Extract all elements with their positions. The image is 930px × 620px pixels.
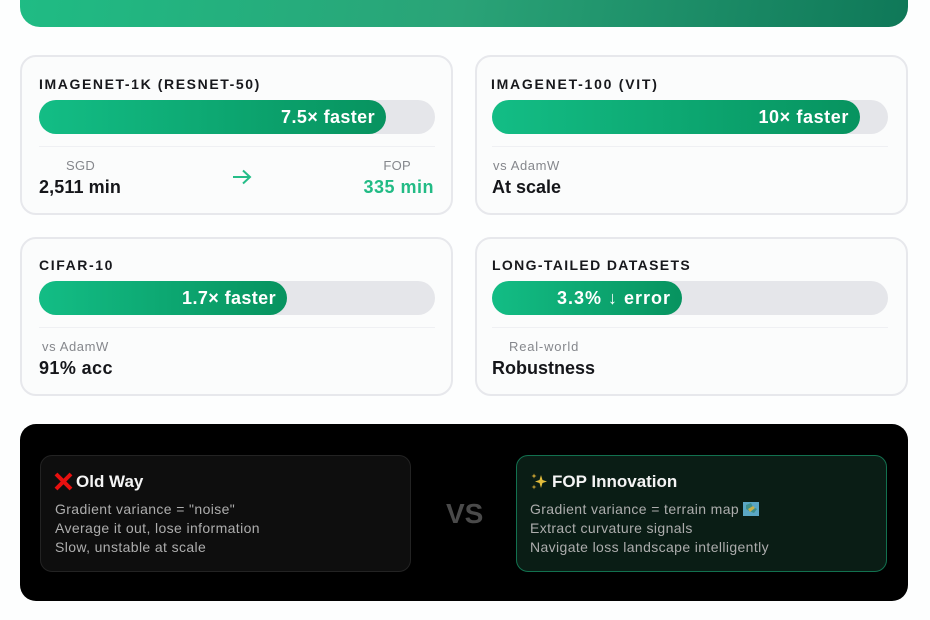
value: FOP time: 335 min [363,177,434,197]
progress bar: 7.5x faster [39,100,435,134]
label: real-world: Real-world [509,339,579,354]
heading: FOP innovation: FOP Innovation [552,472,677,491]
panel: old way [40,455,411,572]
header banner [20,0,908,27]
progress bar: 3.3% error: 3.3% ↓ error [557,288,671,308]
text: old way points [55,501,260,555]
label: versus: VS [446,498,483,529]
heading: long-tailed datasets: LONG-TAILED DATASETS [492,256,691,272]
label: vs AdamW: vs AdamW [493,158,560,173]
heading: CIFAR-10: CIFAR-10 [39,256,114,272]
value: robustness: Robustness [492,358,595,378]
label: SGD: SGD [66,158,95,173]
heading: ImageNet-100: IMAGENET-100 (VIT) [491,76,659,92]
panel: ImageNet-100 [475,55,908,215]
panel: comparison [20,424,908,601]
heading: ImageNet-1K: IMAGENET-1K (RESNET-50) [39,76,261,92]
progress bar: 7.5x faster: 7.5× faster [281,107,375,127]
progress bar: 10x faster [492,100,888,134]
text: FOP points: Gradient variance = terrain map [530,501,739,517]
text: FOP points: Extract curvature signals [530,520,693,536]
value: at scale: At scale [492,177,561,197]
icon: arrow [233,170,252,184]
progress bar: 1.7x faster [39,281,435,315]
label: FOP: FOP [383,158,411,173]
text: FOP points: Navigate loss landscape intelligently [530,539,769,555]
panel: long-tailed datasets [475,237,908,396]
text: old way points: Slow, unstable at scale [55,539,206,555]
value: 91% acc: 91% acc [39,358,113,378]
heading: old way: Old Way [76,472,143,491]
label: vs AdamW: vs AdamW [42,339,109,354]
icon: red cross [54,472,72,490]
panel: CIFAR-10 [20,237,453,396]
value: SGD time: 2,511 min [39,177,121,197]
progress bar: 3.3% error [492,281,888,315]
icon: sparkles [532,474,547,490]
text: old way points: Gradient variance = "noise" [55,501,235,517]
panel: ImageNet-1K [20,55,453,215]
text: old way points: Average it out, lose information [55,520,260,536]
icon: terrain map [743,502,759,516]
text: FOP points [530,501,769,555]
panel: FOP innovation [516,455,887,572]
progress bar: 10x faster: 10× faster [758,107,849,127]
progress bar: 1.7x faster: 1.7× faster [182,288,276,308]
